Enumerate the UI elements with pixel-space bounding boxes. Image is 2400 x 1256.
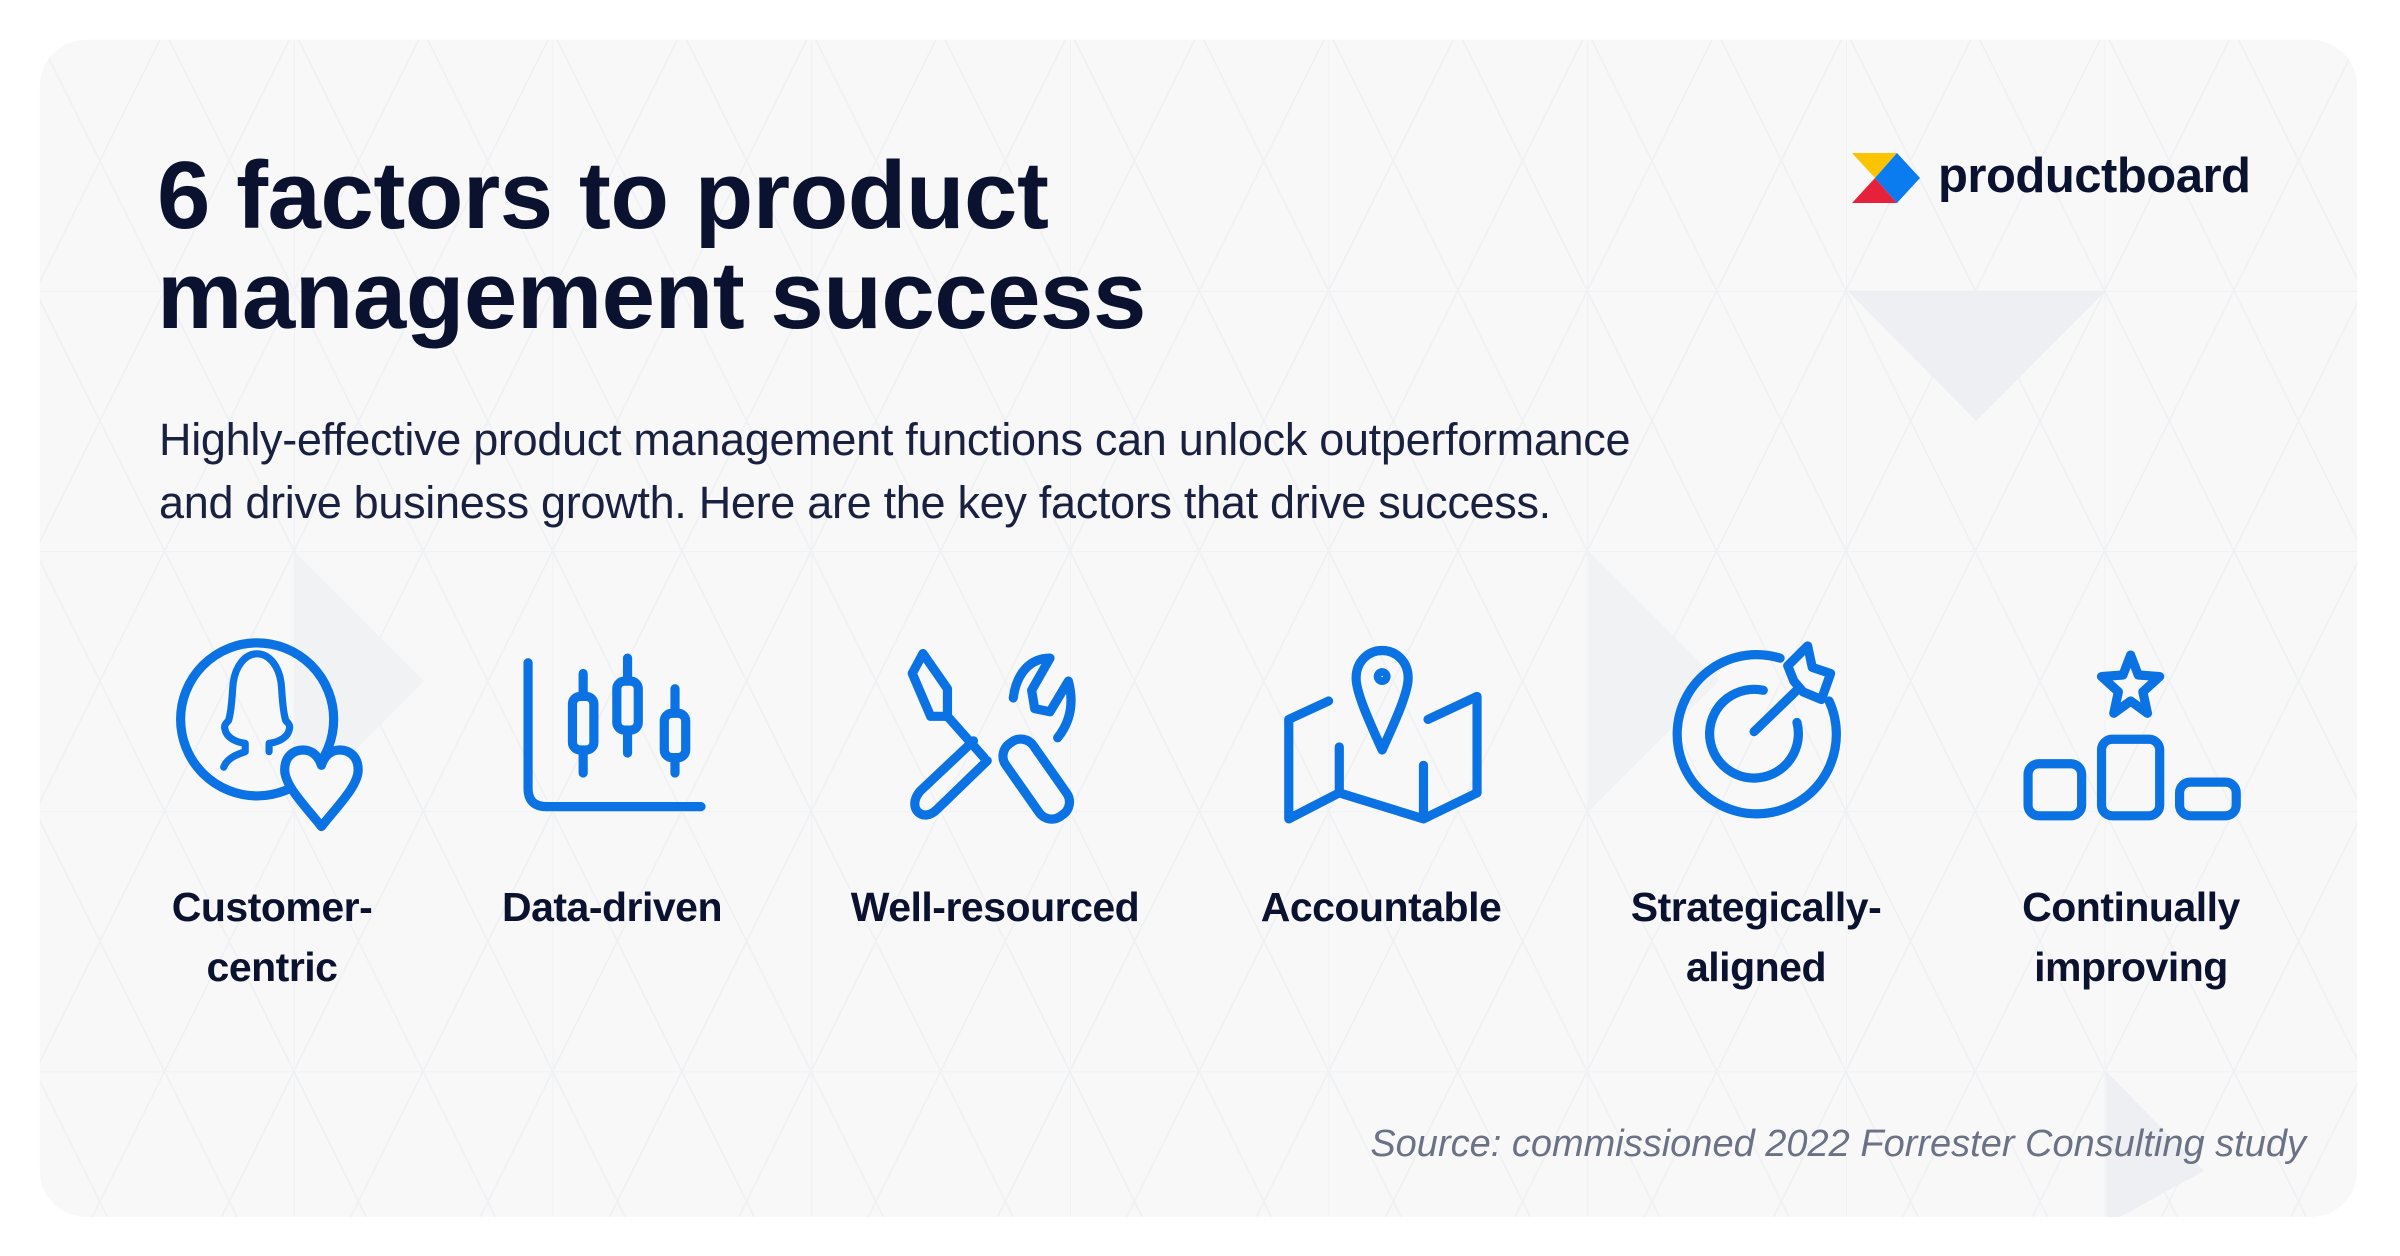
logo	[1852, 149, 2250, 203]
title: 6 factors to product	[157, 142, 1048, 249]
title	[157, 142, 1146, 349]
label: strategically-aligned: aligned	[1686, 944, 1826, 990]
label: customer-centric: centric	[207, 944, 337, 990]
icon: strategically-aligned	[1677, 646, 1836, 814]
label: strategically-aligned	[1631, 884, 1881, 990]
label: customer-centric	[172, 884, 372, 990]
label: customer-centric: Customer-	[172, 884, 372, 930]
source note: Source: commissioned 2022 Forrester Consulting study	[1370, 1123, 2306, 1165]
icon: data-driven	[528, 658, 701, 807]
icon: accountable	[1289, 650, 1477, 819]
label: continually improving: Continually	[2022, 884, 2240, 930]
subtitle	[159, 414, 1630, 528]
subtitle: Highly-effective product management functions can unlock outperformance	[159, 414, 1630, 465]
icon: logo mark	[1852, 153, 1920, 203]
logo text: productboard	[1938, 149, 2250, 203]
icon: well-resourced	[912, 654, 1075, 825]
label: well-resourced: Well-resourced	[851, 884, 1139, 930]
label: strategically-aligned: Strategically-	[1631, 884, 1881, 930]
title: management success	[157, 242, 1146, 349]
label: data-driven: Data-driven	[502, 884, 722, 930]
label: accountable: Accountable	[1261, 884, 1501, 930]
label: continually improving: improving	[2034, 944, 2228, 990]
icon: continually improving	[2028, 655, 2236, 816]
label: continually improving	[2022, 884, 2240, 990]
subtitle: and drive business growth. Here are the key factors that drive success.	[159, 477, 1551, 528]
icon: customer-centric	[181, 643, 358, 827]
